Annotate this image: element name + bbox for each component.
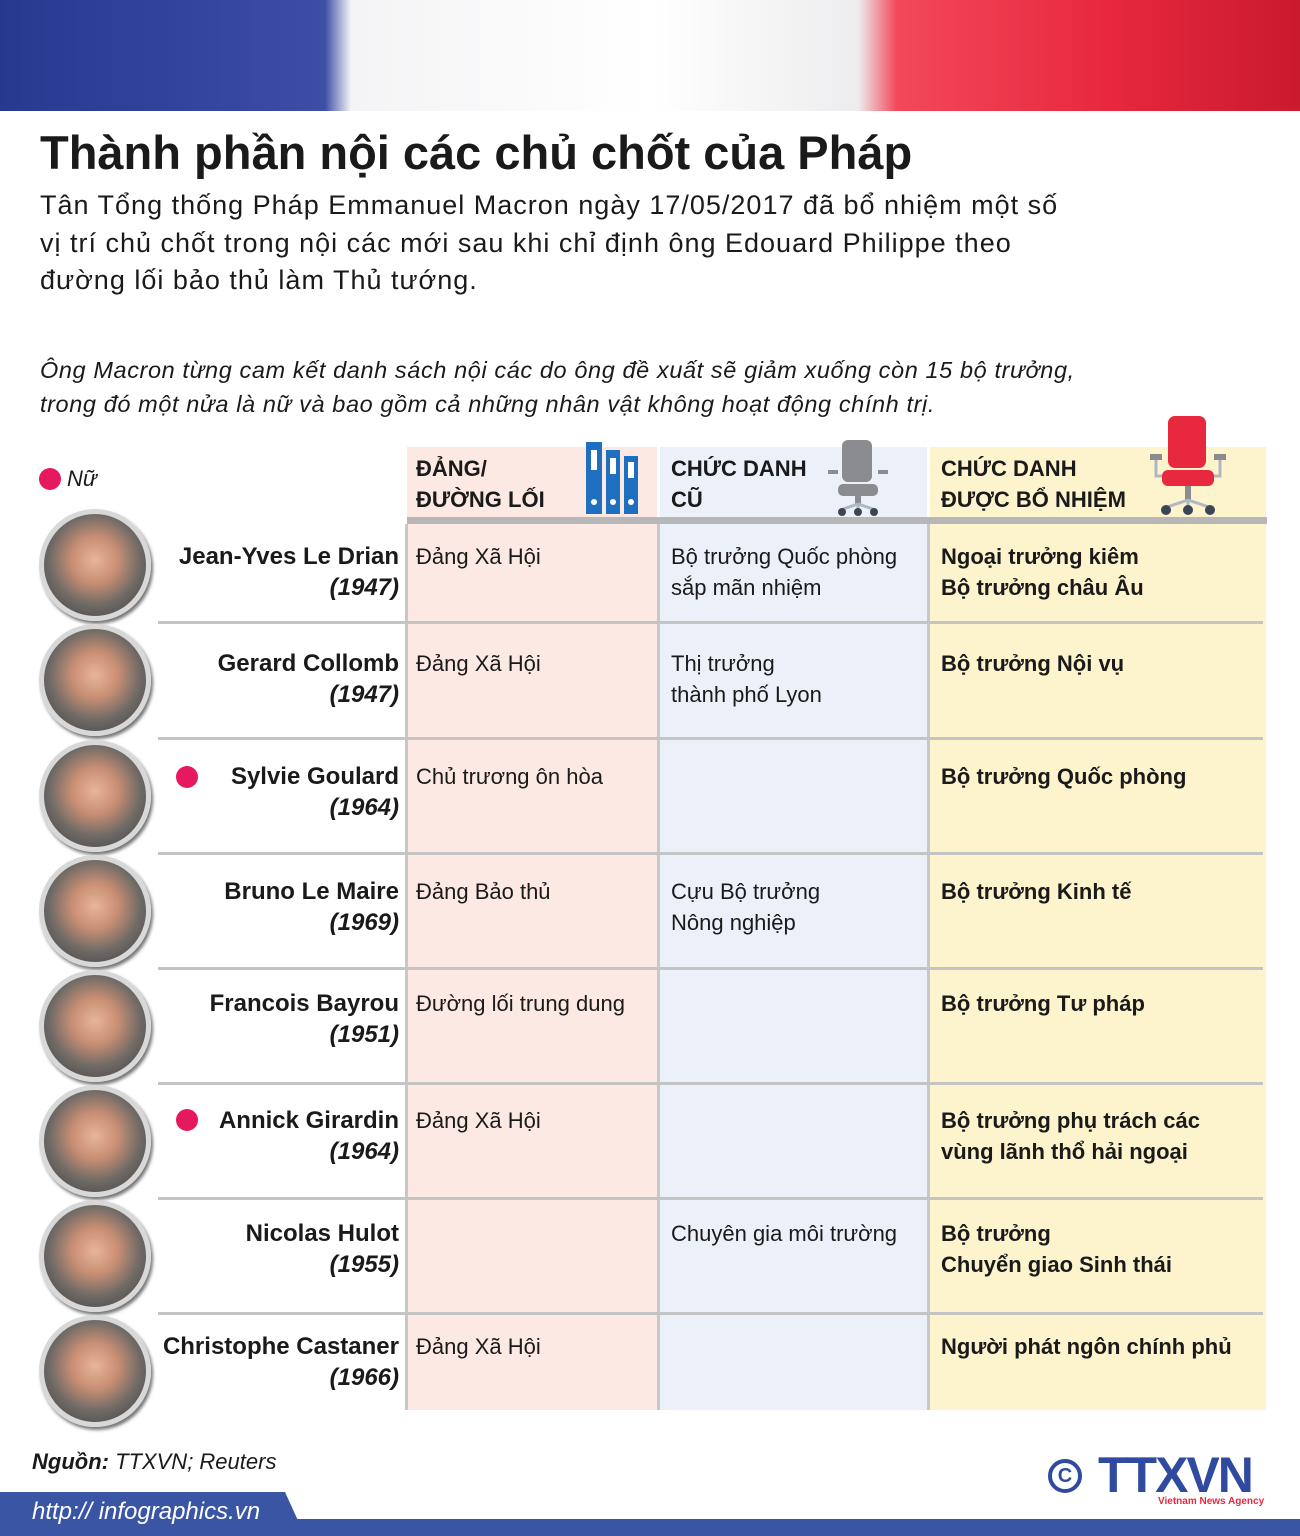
row 2: thành phố Lyon (671, 682, 822, 707)
row 8: Người phát ngôn chính phủ (941, 1334, 1232, 1359)
legend: female: Nữ (67, 466, 97, 491)
row 8: Christophe Castaner (163, 1333, 399, 1360)
row 2: Thị trưởng (671, 651, 775, 676)
header: new title (941, 456, 1126, 512)
row 5: Đường lối trung dung (416, 991, 625, 1016)
row 6: vùng lãnh thổ hải ngoại (941, 1139, 1188, 1164)
row 4: Nông nghiệp (671, 910, 796, 935)
italic note: Ông Macron từng cam kết danh sách nội các do ông đề xuất sẽ giảm xuống còn 15 bộ trưởng, (40, 357, 1075, 383)
icon: red chair (1150, 416, 1226, 515)
name: (1947) (330, 574, 399, 601)
flag banner (0, 0, 1300, 111)
name: Jean-Yves Le Drian (179, 543, 399, 570)
row 6: (1964) (330, 1138, 399, 1165)
row 8: Đảng Xã Hội (416, 1334, 541, 1359)
header: new title: ĐƯỢC BỔ NHIỆM (941, 487, 1126, 512)
row 1: Bộ trưởng Quốc phòng (671, 544, 897, 569)
row 4 (38, 855, 1132, 972)
row 7: Chuyển giao Sinh thái (941, 1252, 1172, 1277)
row 3: Chủ trương ôn hòa (416, 764, 603, 789)
header: party (416, 456, 545, 512)
row 3 (38, 740, 1186, 856)
row 2: Gerard Collomb (218, 650, 399, 677)
row 4: Cựu Bộ trưởng (671, 879, 820, 904)
name (179, 543, 399, 601)
row 6: Bộ trưởng phụ trách các (941, 1108, 1200, 1133)
row 2: Bộ trưởng Nội vụ (941, 651, 1124, 676)
row 8: (1966) (330, 1364, 399, 1391)
logo TTXVN: TTXVN (1098, 1447, 1252, 1503)
logo TTXVN (1048, 1447, 1264, 1507)
row 1: Ngoại trưởng kiêm (941, 544, 1139, 569)
row 7: Nicolas Hulot (246, 1220, 399, 1247)
row lines (158, 621, 1263, 624)
row 4: Bruno Le Maire (224, 878, 399, 905)
row 5 (38, 970, 1145, 1086)
row 1: sắp mãn nhiệm (671, 575, 821, 600)
footer url tab: http:// infographics.vn (32, 1498, 260, 1525)
header: party: ĐẢNG/ (416, 456, 487, 481)
row 3: Bộ trưởng Quốc phòng (941, 764, 1186, 789)
row 8 (38, 1315, 1232, 1432)
icon: grey chair (828, 440, 888, 516)
intro text (40, 190, 1058, 295)
row 1 (38, 509, 1144, 626)
header: new title: CHỨC DANH (941, 456, 1077, 481)
row 5: Francois Bayrou (210, 990, 399, 1017)
footer url tab (0, 1492, 298, 1524)
row 4: (1969) (330, 909, 399, 936)
source: Nguồn: TTXVN; Reuters (32, 1449, 276, 1474)
row 6: Annick Girardin (219, 1107, 399, 1134)
photo (39, 509, 151, 621)
row 1: Bộ trưởng châu Âu (941, 575, 1144, 600)
row 1: Đảng Xã Hội (416, 544, 541, 569)
icon: binders (586, 442, 638, 514)
row 6 (38, 1085, 1200, 1202)
header bar (407, 517, 1267, 524)
header: former title: CŨ (671, 487, 703, 512)
row 2 (38, 624, 1124, 740)
header: party: ĐƯỜNG LỐI (416, 487, 545, 512)
italic note: trong đó một nửa là nữ và bao gồm cả những nhân vật không hoạt động chính trị. (40, 391, 935, 417)
intro text: đường lối bảo thủ làm Thủ tướng. (40, 265, 478, 295)
legend: female (39, 466, 98, 491)
header: former title: CHỨC DANH (671, 456, 807, 481)
footer bar (0, 1519, 1300, 1536)
row 2: (1947) (330, 681, 399, 708)
row 4: Đảng Bảo thủ (416, 879, 551, 904)
logo TTXVN: Vietnam News Agency (1158, 1496, 1264, 1507)
row 7 (38, 1200, 1172, 1316)
intro text: vị trí chủ chốt trong nội các mới sau khi chỉ định ông Edouard Philippe theo (40, 228, 1012, 258)
row 2: Đảng Xã Hội (416, 651, 541, 676)
row 3: (1964) (330, 794, 399, 821)
row 6: Đảng Xã Hội (416, 1108, 541, 1133)
logo TTXVN: C (1058, 1465, 1072, 1487)
row 4: Bộ trưởng Kinh tế (941, 879, 1131, 904)
row 5: (1951) (330, 1021, 399, 1048)
intro text: Tân Tổng thống Pháp Emmanuel Macron ngày 17/05/2017 đã bổ nhiệm một số (40, 190, 1058, 220)
row 3: Sylvie Goulard (231, 763, 399, 790)
title: Thành phần nội các chủ chốt của Pháp (40, 126, 912, 179)
vertical dividers (405, 524, 408, 1410)
row 7: Chuyên gia môi trường (671, 1221, 897, 1246)
column backgrounds (407, 447, 657, 1410)
italic note (40, 357, 1075, 417)
row 7: Bộ trưởng (941, 1221, 1051, 1246)
row 5: Bộ trưởng Tư pháp (941, 991, 1145, 1016)
header: former title (671, 456, 807, 512)
row 7: (1955) (330, 1251, 399, 1278)
